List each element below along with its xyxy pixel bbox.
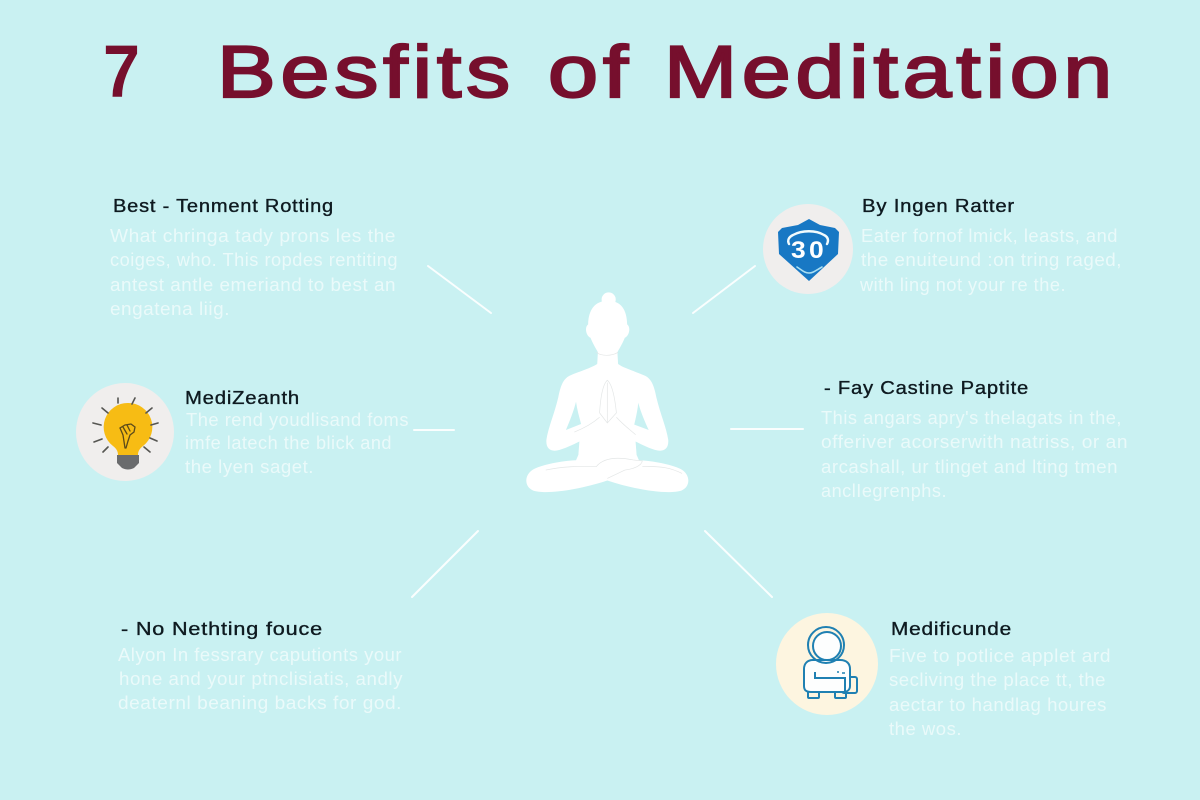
body text: aectar to handlag houres bbox=[889, 695, 1107, 715]
body text: arcashall, ur tlinget and lting tmen bbox=[821, 457, 1118, 477]
body text: with ling not your re the. bbox=[859, 275, 1066, 295]
body text: the lyen saget. bbox=[185, 457, 314, 477]
body text bbox=[821, 408, 1128, 501]
title: Meditation bbox=[664, 32, 1117, 113]
heading: By Ingen Ratter bbox=[862, 196, 1015, 216]
body text: offeriver acorserwith natriss, or an bbox=[821, 432, 1128, 452]
connector lines bbox=[412, 266, 803, 597]
panel: middle right benefit bbox=[821, 378, 1128, 501]
panel: top right benefit bbox=[859, 196, 1122, 295]
hands and leg outlines bbox=[546, 352, 682, 478]
body text: coiges, who. This ropdes rentiting bbox=[110, 250, 398, 270]
icon: blue shield: 30 bbox=[791, 237, 827, 264]
body text bbox=[889, 646, 1111, 739]
body text: antest antle emeriand to best an bbox=[110, 275, 396, 295]
body text: the enuiteund :on tring raged, bbox=[861, 250, 1122, 270]
body text: This angars apry's thelagats in the, bbox=[821, 408, 1122, 428]
heading: - No Nethting fouce bbox=[121, 619, 323, 639]
body text: anclIegrenphs. bbox=[821, 481, 947, 501]
panel: top left benefit bbox=[110, 196, 398, 319]
body text bbox=[859, 226, 1122, 295]
body text: What chringa tady prons les the bbox=[110, 226, 396, 246]
body text: deaternl beaning backs for god. bbox=[118, 693, 402, 713]
title: 7 bbox=[103, 30, 140, 113]
body text: imfe latech the blick and bbox=[185, 433, 392, 453]
body text: Eater fornof lmick, leasts, and bbox=[861, 226, 1118, 246]
central meditating figure bbox=[526, 292, 688, 492]
heading: MediZeanth bbox=[185, 388, 300, 408]
heading: Best - Tenment Rotting bbox=[113, 196, 334, 216]
body text: engatena liig. bbox=[110, 299, 230, 319]
body text: secliving the place tt, the bbox=[889, 670, 1106, 690]
title: Besfits bbox=[217, 32, 515, 113]
body text: The rend youdlisand foms bbox=[186, 410, 409, 430]
heading: - Fay Castine Paptite bbox=[824, 378, 1029, 398]
body text: the wos. bbox=[889, 719, 962, 739]
body text bbox=[118, 645, 403, 713]
body text bbox=[110, 226, 398, 319]
panel: middle left benefit bbox=[185, 388, 409, 477]
panel: bottom left benefit bbox=[118, 619, 403, 713]
body text: Alyon In fessrary caputionts your bbox=[118, 645, 402, 665]
heading: Medificunde bbox=[891, 619, 1012, 639]
panel: bottom right benefit bbox=[889, 619, 1111, 739]
title: of bbox=[548, 32, 633, 113]
body text bbox=[185, 410, 409, 477]
body text: hone and your ptnclisiatis, andly bbox=[119, 669, 403, 689]
icon: blue shield bbox=[763, 204, 853, 294]
title bbox=[103, 30, 1117, 113]
icon: light bulb bbox=[76, 383, 174, 481]
icon: seated person bbox=[776, 613, 878, 715]
body text: Five to potlice applet ard bbox=[889, 646, 1111, 666]
